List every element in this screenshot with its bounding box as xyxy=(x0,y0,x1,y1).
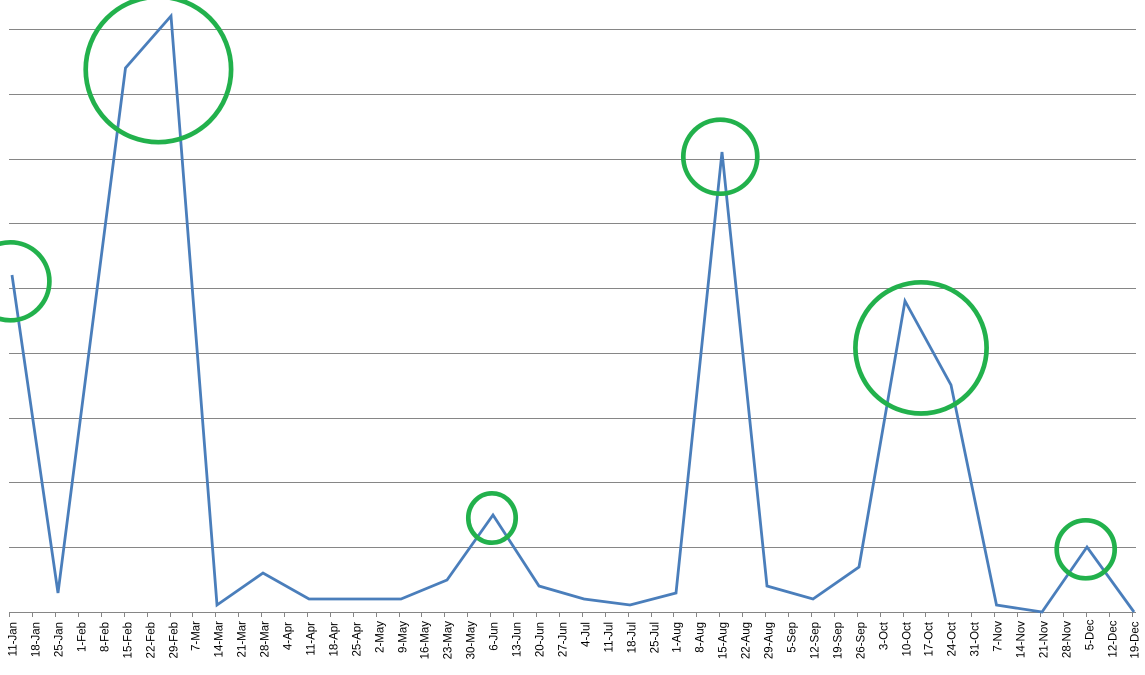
x axis line and ticks xyxy=(9,612,1136,617)
x axis date labels: 8-Feb xyxy=(100,622,112,652)
x axis date labels: 3-Oct xyxy=(878,621,890,650)
x axis date labels: 21-Mar xyxy=(236,621,248,657)
x axis date labels: 14-Mar xyxy=(214,621,226,657)
x axis date labels: 11-Apr xyxy=(306,622,318,656)
x axis date labels: 12-Sep xyxy=(810,622,822,659)
x axis date labels: 28-Mar xyxy=(260,621,272,657)
x axis date labels: 15-Feb xyxy=(122,622,134,658)
x axis date labels: 4-Jul xyxy=(580,622,592,647)
x axis date labels: 11-Jan xyxy=(8,622,20,656)
x axis date labels: 18-Jan xyxy=(30,622,42,657)
x axis date labels: 16-May xyxy=(420,621,432,659)
x axis date labels: 1-Aug xyxy=(672,622,684,653)
x axis date labels: 25-Jul xyxy=(650,622,662,653)
x axis date labels: 14-Nov xyxy=(1016,621,1028,658)
circle: 11-Jan xyxy=(0,242,49,320)
x axis date labels: 5-Sep xyxy=(786,622,798,653)
x axis date labels: 13-Jun xyxy=(512,622,524,657)
x axis date labels: 22-Feb xyxy=(146,622,158,658)
x axis date labels: 6-Jun xyxy=(488,622,500,651)
x axis date labels: 27-Jun xyxy=(558,622,570,657)
x axis date labels: 18-Apr xyxy=(328,622,340,657)
x axis date labels: 30-May xyxy=(466,621,478,659)
x axis date labels: 4-Apr xyxy=(282,622,294,650)
x axis date labels: 17-Oct xyxy=(924,621,936,657)
x axis date labels: 19-Dec xyxy=(1130,621,1142,659)
x axis date labels: 26-Sep xyxy=(856,622,868,659)
x axis date labels: 22-Aug xyxy=(740,622,752,659)
x axis date labels: 7-Nov xyxy=(992,621,1004,652)
x axis date labels: 25-Apr xyxy=(352,622,364,657)
x axis date labels: 29-Feb xyxy=(168,622,180,658)
x axis date labels: 2-May xyxy=(374,621,386,653)
x axis date labels: 20-Jun xyxy=(534,622,546,657)
x axis date labels: 11-Jul xyxy=(604,622,616,652)
x axis date labels xyxy=(8,619,1142,659)
x axis date labels: 9-May xyxy=(398,621,410,653)
circle: 5-Dec xyxy=(1057,520,1115,578)
x axis date labels: 28-Nov xyxy=(1062,621,1074,658)
x axis date labels: 21-Nov xyxy=(1038,621,1050,658)
circle: 15 to 29 Feb xyxy=(86,0,231,142)
x axis date labels: 10-Oct xyxy=(902,621,914,657)
x axis date labels: 31-Oct xyxy=(970,621,982,657)
x axis date labels: 5-Dec xyxy=(1084,619,1096,650)
x axis date labels: 29-Aug xyxy=(764,622,776,659)
x axis date labels: 12-Dec xyxy=(1108,620,1120,658)
x axis date labels: 18-Jul xyxy=(626,622,638,653)
circle: 6-Jun xyxy=(468,493,516,543)
x axis date labels: 7-Mar xyxy=(190,621,202,651)
x axis date labels: 1-Feb xyxy=(76,622,88,652)
x axis date labels: 15-Aug xyxy=(718,622,730,659)
x axis date labels: 24-Oct xyxy=(946,621,958,657)
x axis date labels: 23-May xyxy=(442,621,454,659)
x axis date labels: 19-Sep xyxy=(832,622,844,659)
circle: 15-Aug xyxy=(683,120,757,194)
circle: 10 to 24 Oct xyxy=(855,282,987,414)
x axis date labels: 8-Aug xyxy=(694,622,706,653)
x axis date labels: 25-Jan xyxy=(54,622,66,657)
